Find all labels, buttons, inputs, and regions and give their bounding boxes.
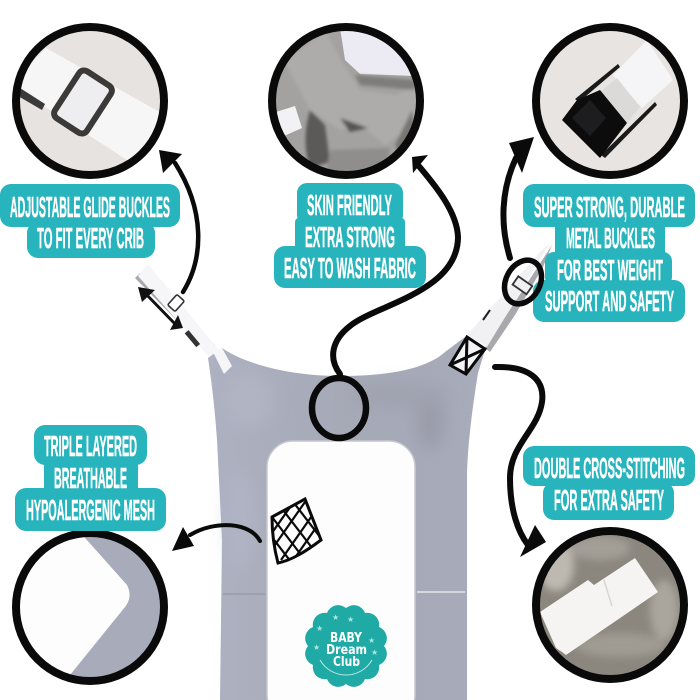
right strap xyxy=(467,243,552,352)
marker: mesh grid xyxy=(270,496,323,565)
text: ADJUSTABLE GLIDE BUCKLES xyxy=(10,192,170,224)
label: double cross-stitching xyxy=(523,446,695,520)
label: triple layered mesh xyxy=(15,425,166,531)
label: adjustable glide buckles xyxy=(0,184,180,258)
logo stars: ★ xyxy=(313,643,320,652)
label: adjustable glide buckles: TO FIT EVERY CRIB xyxy=(37,223,144,255)
webbing strap xyxy=(21,48,159,160)
logo: Baby Dream Club xyxy=(305,605,387,687)
logo stars: ★ xyxy=(316,624,323,633)
logo: Baby Dream Club: BABY xyxy=(330,631,362,646)
left strap xyxy=(135,264,232,374)
label: skin friendly fabric: EXTRA STRONG xyxy=(305,222,395,254)
stitched strap xyxy=(540,558,658,655)
marker: fabric circle xyxy=(312,378,366,438)
arrow: mesh to circle xyxy=(172,525,260,551)
fabric shading xyxy=(226,374,450,570)
strap end on fabric xyxy=(213,348,232,374)
arrow: stitching to circle xyxy=(495,367,546,557)
mesh panel xyxy=(267,441,415,700)
marker: metal buckle ellipse xyxy=(497,254,549,310)
logo stars: ★ xyxy=(371,648,378,657)
arrow: fabric to circle xyxy=(333,155,458,374)
circle: cross-stitching photo xyxy=(530,525,690,685)
circle: adjustable glide buckle photo xyxy=(10,20,170,180)
circle: metal buckle photo xyxy=(530,20,690,180)
arrow: metal buckle to circle xyxy=(503,137,534,258)
webbing strap xyxy=(613,40,673,108)
circle: breathable mesh photo xyxy=(12,531,168,685)
text: EASY TO WASH FABRIC xyxy=(284,253,416,285)
logo stars: ★ xyxy=(368,636,375,645)
arrow: glide buckle to circle xyxy=(159,150,198,292)
logo: Baby Dream Club: Dream xyxy=(326,643,367,658)
marker: cross-stitch box xyxy=(450,337,485,374)
label: skin friendly fabric: SKIN FRIENDLY xyxy=(307,190,392,222)
text: HYPOALERGENIC MESH xyxy=(26,495,155,527)
logo stars: ★ xyxy=(332,613,339,622)
buckle rails xyxy=(575,64,620,102)
buckle xyxy=(52,68,114,136)
hammock xyxy=(135,243,552,700)
logo: Baby Dream Club: Club xyxy=(333,655,360,670)
text: TRIPLE LAYERED xyxy=(44,431,137,463)
label: triple layered mesh: BREATHABLE xyxy=(54,463,127,495)
label: skin friendly fabric xyxy=(274,183,426,288)
seams xyxy=(223,592,465,594)
hammock fabric xyxy=(208,337,485,700)
marker: glide buckle detail xyxy=(138,287,184,330)
label: metal buckles xyxy=(523,184,695,322)
buckle block xyxy=(562,90,627,158)
logo stars xyxy=(313,613,378,657)
logo stars: ★ xyxy=(347,615,354,624)
circle: fabric photo xyxy=(268,22,424,180)
